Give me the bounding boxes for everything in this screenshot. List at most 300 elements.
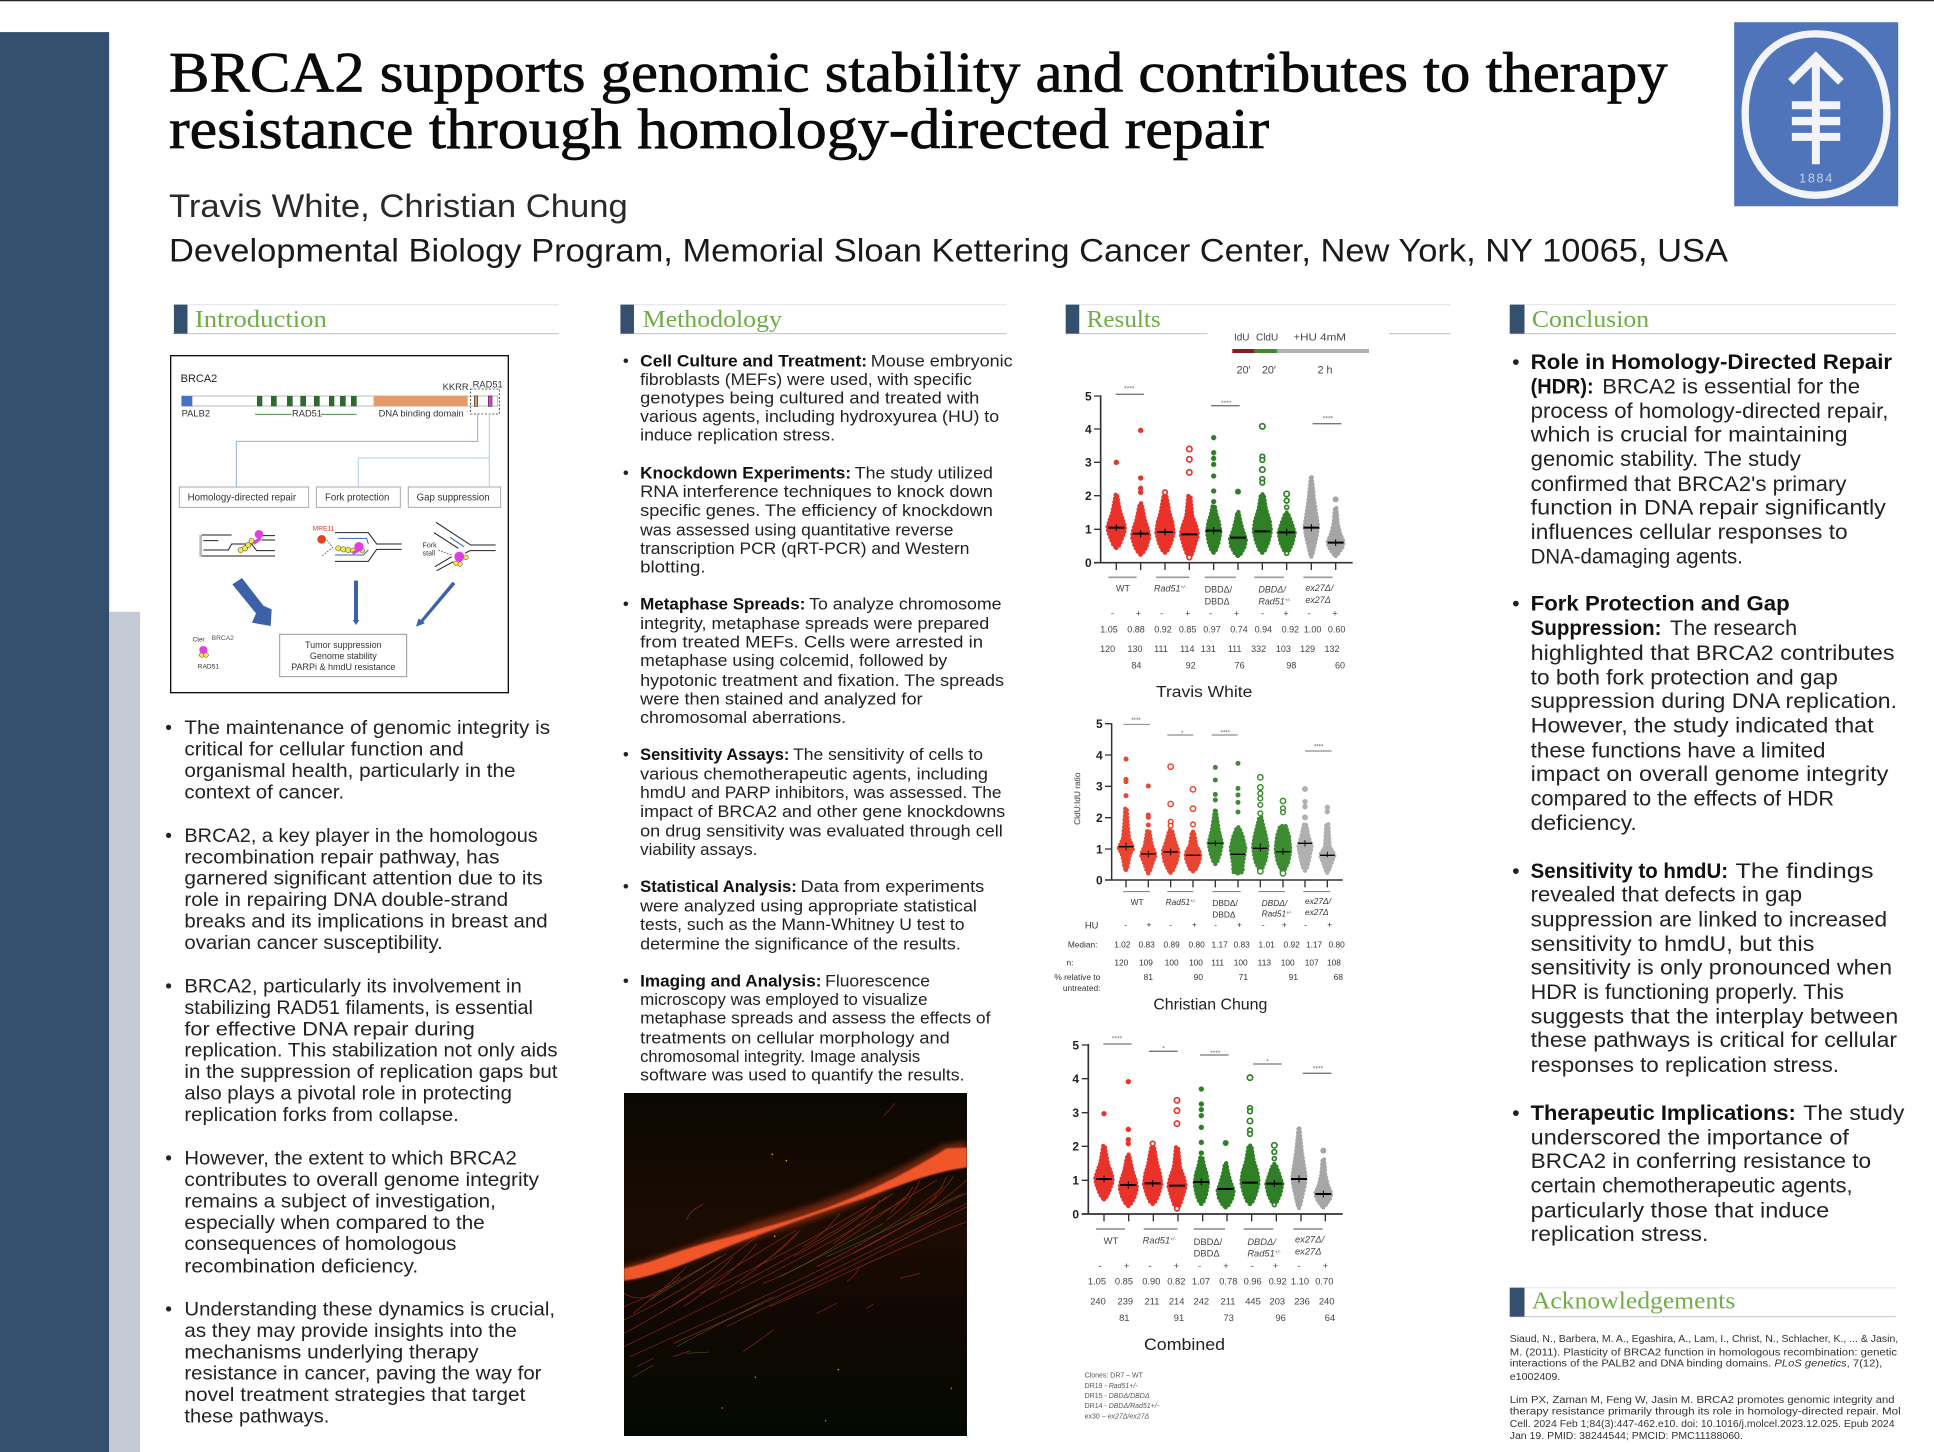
data table rows: 240 [1319,1296,1334,1306]
data table rows: - [1262,919,1265,929]
genotype labels: WT [1116,584,1130,594]
data table rows: 332 [1251,644,1266,654]
genotype labels: Rad51 [1262,909,1286,919]
data table rows: 129 [1300,644,1315,654]
text block: introduction bullets: context of cancer. [184,783,344,804]
figure: BRCA2 domain schematic: BRCA2 [181,373,217,385]
text block: methodology bullets: hmdU and PARP inhibitors, was assessed. The [640,783,1002,802]
data table rows: 64 [1325,1313,1335,1323]
text block: methodology bullets: • [623,745,629,764]
data table rows: - [1124,919,1127,929]
data table rows: 211 [1221,1296,1235,1306]
clones legend: ex30 – ex27Δ/ex27Δ [1085,1413,1149,1420]
heading: methodology [620,305,1006,334]
data table rows: + [1223,1261,1229,1271]
significance bars: * [1266,1058,1269,1065]
data table rows: 1.17 [1306,939,1322,949]
data table rows: 203 [1270,1296,1285,1306]
axes: 4 [1085,422,1092,436]
figure: BRCA2 domain schematic: PALB2 [182,409,210,419]
text block: methodology bullets: was assessed using quantitative reverse [639,520,953,539]
figure: BRCA2 domain schematic: RAD51 [198,664,219,671]
text block: conclusion bullets: revealed that defects in gap [1531,883,1802,907]
text block: introduction bullets: contributes to overall genome integrity [184,1170,539,1191]
text block: conclusion bullets: HDR is functioning properly. This [1531,980,1844,1004]
panel: acknowledgements [1510,1288,1901,1442]
figure: BRCA2 domain schematic: Fork [423,542,437,549]
text block: methodology bullets: were then stained and analyzed for [639,689,923,708]
genotype labels: DBDΔ/ [1262,898,1289,908]
text block: introduction bullets: breaks and its implications in breast and [184,912,548,933]
axes [1072,1038,1343,1221]
data table rows: 0.92 [1282,624,1299,634]
data table rows: 131 [1201,644,1216,654]
text block: introduction bullets: stabilizing RAD51 filaments, is essential [184,998,533,1019]
genotype labels: DBDΔ/ [1247,1237,1277,1247]
affiliation: Developmental Biology Program, Memorial Sloan Kettering Cancer Center, New York, NY 10065, USA [169,231,1728,268]
text block: introduction bullets: mechanisms underlying therapy [184,1343,479,1364]
text block: methodology bullets: The sensitivity of cells to [793,745,983,764]
text block: methodology bullets: • [623,877,629,896]
heading: conclusion: Conclusion [1532,306,1649,333]
data table rows: + [1237,919,1242,929]
text block: references: interactions of the PALB2 and DNA binding domains. PLoS genetics , 7(12), [1510,1359,1882,1370]
genotype labels: ex27Δ [1305,907,1329,917]
data table rows: - [1209,609,1212,619]
axes: 2 [1085,489,1092,503]
data table rows: 114 [1180,644,1194,654]
genotype labels: DBDΔ [1205,596,1230,606]
chart: Combined dot plot [1072,1036,1343,1420]
data table rows: 240 [1090,1296,1106,1306]
data table rows: + [1174,1261,1179,1271]
data table rows: 0.92 [1269,1277,1287,1287]
text block: conclusion bullets: BRCA2 in conferring resistance to [1531,1149,1871,1173]
caption: Christian Chung: Christian Chung [1153,996,1267,1013]
text block: methodology bullets: induce replication stress. [640,425,835,444]
heading: acknowledgements: Acknowledgements [1532,1288,1735,1315]
caption: Travis White: Travis White [1156,684,1252,701]
figure: BRCA2 domain schematic [171,356,508,693]
data table rows: 76 [1235,660,1245,670]
text block: introduction bullets: BRCA2, a key player in the homologous [184,826,538,847]
data table rows [1088,1261,1335,1323]
data table rows: + [1147,919,1152,929]
text block: methodology bullets: • [623,594,629,613]
data table rows: 1.00 [1304,624,1321,634]
text block: introduction bullets: for effective DNA repair during [184,1019,475,1040]
title [169,41,1668,161]
axes: 1 [1096,842,1103,856]
treatment timeline [1232,333,1369,376]
data table rows: - [1297,1261,1301,1271]
text block: introduction bullets: • [165,826,172,847]
text block: introduction bullets: replication forks from collapse. [184,1105,459,1126]
text block: methodology bullets: Statistical Analysis: [640,877,797,896]
data table rows: untreated: [1063,983,1100,993]
text block: conclusion bullets: • [1512,592,1520,616]
data table rows: 103 [1276,644,1291,654]
data table rows: HU [1085,920,1099,930]
data table rows: 84 [1131,660,1141,670]
text block: methodology bullets: Knockdown Experiments: [640,464,851,483]
data table rows: 0.89 [1164,939,1180,949]
data table rows: 81 [1144,972,1153,982]
clones legend [1085,1373,1160,1420]
text block: methodology bullets: chromosomal integrity. Image analysis [640,1047,920,1066]
text block: conclusion bullets: • [1512,350,1520,374]
figure: BRCA2 domain schematic: KKRR [443,382,469,392]
clones legend: DR15 - DBDΔ/DBDΔ [1085,1393,1150,1400]
text block: methodology bullets: specific genes. The efficiency of knockdown [640,501,993,520]
axes: 4 [1096,748,1103,762]
logo: MSK 1884 [1734,22,1898,206]
significance bars: **** [1323,416,1334,423]
treatment timeline: 20′ [1237,364,1251,376]
caption: Combined: Combined [1144,1335,1225,1354]
data table rows: 1.17 [1212,939,1228,949]
data table rows: - [1160,609,1163,619]
text block: methodology bullets: Mouse embryonic [871,351,1013,370]
axes: 0 [1072,1207,1079,1221]
text block: methodology bullets: chromosomal aberrations. [640,708,846,727]
text block: methodology bullets: on drug sensitivity was evaluated through cell [640,821,1003,840]
genotype labels: ex27Δ [1305,595,1331,605]
text block: conclusion bullets: Role in Homology-Directed Repair [1531,350,1892,374]
text block: conclusion bullets: DNA-damaging agents. [1531,545,1743,569]
text block: conclusion bullets: (HDR): [1531,374,1594,398]
data table rows: 1.01 [1259,939,1275,949]
text block: methodology bullets: Sensitivity Assays: [640,745,789,764]
data table rows: 132 [1324,644,1339,654]
data table rows: - [1251,1261,1254,1271]
genotype labels: Rad51 [1258,596,1285,606]
text block: conclusion bullets: sensitivity is only pronounced when [1531,955,1892,979]
significance bars: **** [1313,1065,1324,1072]
text block: methodology bullets: determine the significance of the results. [640,935,961,954]
significance bars: **** [1221,400,1232,407]
figure: BRCA2 domain schematic: Fork protection [325,493,389,504]
text block: introduction bullets: consequences of homologous [184,1234,456,1255]
text block: introduction bullets: • [165,1299,172,1320]
figure: BRCA2 domain schematic: DNA binding domain [379,409,464,419]
sidebar: light strip [109,612,140,1452]
axes: 4 [1072,1072,1079,1086]
significance bars: **** [1112,1036,1123,1043]
data table rows: - [1098,1261,1102,1271]
data table rows: 100 [1165,958,1179,968]
heading: results: Results [1087,306,1161,333]
genotype labels: Rad51 [1247,1249,1275,1259]
text block: introduction bullets: BRCA2, particularly its involvement in [184,976,522,997]
treatment timeline: 20′ [1262,364,1276,376]
data table rows: 0.74 [1230,624,1248,634]
genotype labels: Rad51 [1143,1235,1170,1245]
genotype labels: DBDΔ/ [1194,1237,1223,1247]
figure: BRCA2 domain schematic: Gap suppression [417,493,490,504]
text block: methodology bullets: integrity, metaphase spreads were prepared [640,614,989,633]
data table rows: - [1169,919,1172,929]
text block: references: Cell. 2024 Feb 1;84(3):447-462.e10. doi: 10.1016/j.molcel.2023.12.025. Epub 2024 [1510,1419,1895,1430]
figure: BRCA2 domain schematic: BRCA2 [212,635,234,642]
data table rows: 0.85 [1115,1277,1133,1287]
text block: conclusion bullets: process of homology-directed repair, [1531,399,1888,423]
axes: 0 [1096,873,1103,887]
significance bars: **** [1221,730,1231,736]
text block: introduction bullets: The maintenance of genomic integrity is [184,718,550,739]
swarms: Christian Chung [1119,757,1335,876]
title: BRCA2 supports genomic stability and contributes to therapy [169,41,1668,104]
text block: methodology bullets: transcription PCR (qRT-PCR) and Western [640,539,969,558]
genotype labels: +/- [1275,1250,1281,1256]
significance bars [1103,1036,1331,1073]
data table rows: 100 [1234,958,1248,968]
data table rows: 100 [1189,958,1203,968]
swarms: Combined [1095,1075,1331,1211]
text block: conclusion bullets: to both fork protection and gap [1531,666,1838,690]
data table rows: 0.83 [1139,939,1155,949]
data table rows: 90 [1194,972,1203,982]
heading: methodology: Methodology [643,306,783,333]
text block: conclusion bullets: sensitivity to hmdU, but this [1531,932,1814,956]
heading: introduction [173,305,559,334]
data table rows: + [1185,609,1190,619]
heading: acknowledgements [1510,1288,1896,1317]
genotype labels [1108,577,1335,606]
text block: conclusion bullets: Fork Protection and Gap [1531,592,1790,616]
data table rows: 0.78 [1219,1277,1237,1287]
genotype labels: DBDΔ [1212,910,1236,920]
genotype labels: ex27Δ/ [1305,896,1333,906]
axes [1072,717,1343,887]
text block: conclusion bullets: responses to replication stress. [1531,1053,1839,1077]
genotype labels [1096,1229,1325,1259]
text block: conclusion bullets [1512,350,1905,1246]
treatment timeline: +HU 4mM [1293,333,1346,344]
text block: conclusion bullets: highlighted that BRCA2 contributes [1531,641,1895,665]
significance bars: **** [1124,385,1135,392]
text block: methodology bullets: Fluorescence [825,972,930,991]
text block: conclusion bullets: influences cellular responses to [1531,520,1848,544]
data table rows [1100,609,1345,670]
text block: introduction bullets: Understanding these dynamics is crucial, [184,1299,555,1320]
text block: methodology bullets: fibroblasts (MEFs) were used, with specific [640,370,972,389]
significance bars: * [1162,1046,1165,1053]
text block: conclusion bullets: However, the study indicated that [1531,714,1874,738]
genotype labels: Rad51 [1154,584,1180,594]
text block: introduction bullets: as they may provide insights into the [184,1321,517,1342]
text block: introduction bullets: remains a subject of investigation, [184,1192,496,1213]
text block: conclusion bullets: these functions have a limited [1531,738,1825,762]
text block: conclusion bullets: The study [1803,1101,1905,1125]
text block: conclusion bullets: genomic stability. The study [1531,447,1801,471]
sidebar: dark blue [0,32,109,1452]
figure: BRCA2 domain schematic: MRE11 [313,526,335,533]
genotype labels: Rad51 [1166,897,1190,907]
significance bars [1123,718,1332,751]
genotype labels: ex27Δ [1295,1246,1321,1256]
clones legend: DR19 - Rad51+/- [1085,1383,1138,1390]
data table rows: 92 [1186,660,1196,670]
text block: methodology bullets: genotypes being cultured and treated with [640,388,979,407]
text block: conclusion bullets: replication stress. [1531,1222,1708,1246]
treatment timeline: 2 h [1318,364,1333,376]
text block: introduction bullets: also plays a pivotal role in protecting [184,1084,512,1105]
figure: BRCA2 domain schematic: Genome stability [310,651,377,661]
axes: 3 [1096,780,1103,794]
text block: introduction bullets: role in repairing DNA double-strand [184,890,508,911]
authors: Travis White, Christian Chung [169,187,628,224]
significance bars: **** [1314,745,1324,751]
data table rows: 1.05 [1088,1277,1106,1287]
genotype labels [1123,892,1333,920]
data table rows: 0.97 [1203,624,1221,634]
data table rows: n: [1067,958,1073,968]
photo: fluorescence microscopy of DNA fibres [624,1093,967,1436]
data table rows: 0.94 [1255,624,1272,634]
clones legend: DR14 - DBDΔ/Rad51+/- [1085,1403,1160,1410]
figure: BRCA2 domain schematic: Tumor suppression [305,640,382,650]
genotype labels: ex27Δ/ [1305,583,1335,593]
data table rows: 91 [1289,972,1298,982]
data table rows: % relative to [1054,972,1101,982]
text block: methodology bullets: various agents, including hydroxyurea (HU) to [640,407,999,426]
axes: 5 [1096,717,1103,731]
genotype labels: +/- [1286,910,1292,915]
text block: introduction bullets: garnered significant attention due to its [184,868,543,889]
logo: MSK 1884: 1884 [1799,172,1834,186]
data table rows: 0.80 [1189,939,1205,949]
text block: introduction bullets: recombination repair pathway, has [184,847,500,868]
text block: methodology bullets: metaphase spreads and assess the effects of [640,1009,991,1028]
data table rows: 91 [1174,1313,1184,1323]
text block: introduction bullets: in the suppression of replication gaps but [184,1062,558,1083]
axes: 2 [1072,1140,1079,1154]
data table rows: + [1332,609,1338,619]
axes: 3 [1072,1106,1079,1120]
text block: methodology bullets: • [623,351,629,370]
data table rows: 111 [1228,644,1241,654]
heading: introduction: Introduction [195,306,327,333]
data table rows: 108 [1327,958,1341,968]
data table rows: 0.92 [1154,624,1172,634]
data table rows: 107 [1305,958,1319,968]
text block: conclusion bullets: • [1512,859,1520,883]
data table rows: 445 [1245,1296,1261,1306]
data table rows: + [1234,609,1239,619]
data table rows: + [1282,919,1287,929]
data table rows: - [1214,919,1217,929]
data table rows: + [1124,1261,1129,1271]
text block: introduction bullets [165,718,558,1428]
data table rows: 68 [1334,972,1343,982]
data table rows: 0.85 [1179,624,1196,634]
figure: BRCA2 domain schematic: RAD51 [473,379,503,389]
text block: conclusion bullets: confirmed that BRCA2's primary [1531,472,1847,496]
data table rows: Median: [1068,939,1097,949]
data table rows: - [1111,609,1114,619]
text block: references: therapy resistance primarily through its role in homology-directed repair. Mol [1510,1407,1901,1418]
panel: methodology [620,305,1013,1436]
text block: methodology bullets: The study utilized [855,464,993,483]
text block: conclusion bullets: deficiency. [1531,811,1637,835]
text block: references [1510,1334,1901,1442]
text block: conclusion bullets: BRCA2 is essential for the [1602,374,1860,398]
data table rows: 73 [1223,1313,1234,1323]
data table rows: 0.90 [1142,1277,1160,1287]
axes: 3 [1085,456,1092,470]
text block: introduction bullets: critical for cellular function and [184,739,464,760]
text block: methodology bullets: blotting. [640,557,706,576]
title: resistance through homology-directed repair [169,98,1269,161]
text block: methodology bullets: impact of BRCA2 and other gene knockdowns [640,802,1005,821]
data table rows: 130 [1127,644,1142,654]
data table rows: - [1307,609,1310,619]
figure: BRCA2 domain schematic: Homology-directed repair [188,493,297,504]
genotype labels: +/- [1170,1236,1176,1242]
text block: conclusion bullets: certain chemotherapeutic agents, [1531,1174,1853,1198]
data table rows: - [1261,609,1264,619]
text block: conclusion bullets: function in DNA repair significantly [1531,495,1886,519]
data table rows: 96 [1275,1313,1286,1323]
genotype labels: WT [1131,897,1144,907]
axes: CldU:IdU ratio [1072,772,1082,825]
data table rows: + [1327,919,1332,929]
data table rows: + [1323,1261,1328,1271]
text block: methodology bullets: from treated MEFs. Cells were arrested in [640,633,983,652]
significance bars: **** [1131,718,1141,724]
text block: conclusion bullets: The research [1670,616,1797,640]
text block: methodology bullets: metaphase using colcemid, followed by [640,651,948,670]
data table rows: 1.02 [1114,939,1131,949]
axes: 0 [1085,556,1092,570]
text block: conclusion bullets: particularly those that induce [1531,1198,1829,1222]
axes [1085,389,1353,570]
text block: introduction bullets: • [165,976,172,997]
text block: methodology bullets: Metaphase Spreads: [640,594,805,613]
genotype labels: DBDΔ/ [1205,585,1233,595]
text block: introduction bullets: • [165,718,172,739]
genotype labels: ex27Δ/ [1295,1235,1325,1245]
data table rows: 0.70 [1315,1277,1333,1287]
genotype labels: WT [1104,1236,1118,1246]
genotype labels: DBDΔ/ [1258,585,1287,595]
text block: introduction bullets: especially when compared to the [184,1213,485,1234]
data table rows: 71 [1239,972,1248,982]
text block: methodology bullets: viability assays. [640,840,757,859]
data table rows: 0.88 [1127,624,1145,634]
text block: introduction bullets: novel treatment strategies that target [184,1385,526,1406]
significance bars: * [1181,731,1184,737]
data table rows: 81 [1119,1313,1130,1323]
text block: methodology bullets: To analyze chromosome [809,594,1002,613]
chart: Christian Chung dot plot [1054,717,1345,1013]
data table rows: - [1304,919,1307,929]
data table rows: 1.07 [1192,1277,1210,1287]
text block: methodology bullets: treatments on cellular morphology and [640,1028,950,1047]
data table rows: 211 [1145,1296,1159,1306]
text block: introduction bullets: replication. This stabilization not only aids [184,1040,558,1061]
treatment timeline: CldU [1256,333,1278,344]
data table rows: 100 [1281,958,1295,968]
text block: references: Jan 19. PMID: 38244544; PMCID: PMC11188060. [1510,1431,1743,1442]
data table rows: 236 [1294,1296,1310,1306]
text block: conclusion bullets: The findings [1735,859,1874,883]
figure: BRCA2 domain schematic: PARPi & hmdU resistance [291,662,395,672]
data table rows [1054,919,1345,993]
figure: BRCA2 domain schematic: stall [423,551,436,558]
text block: methodology bullets: • [623,972,629,991]
